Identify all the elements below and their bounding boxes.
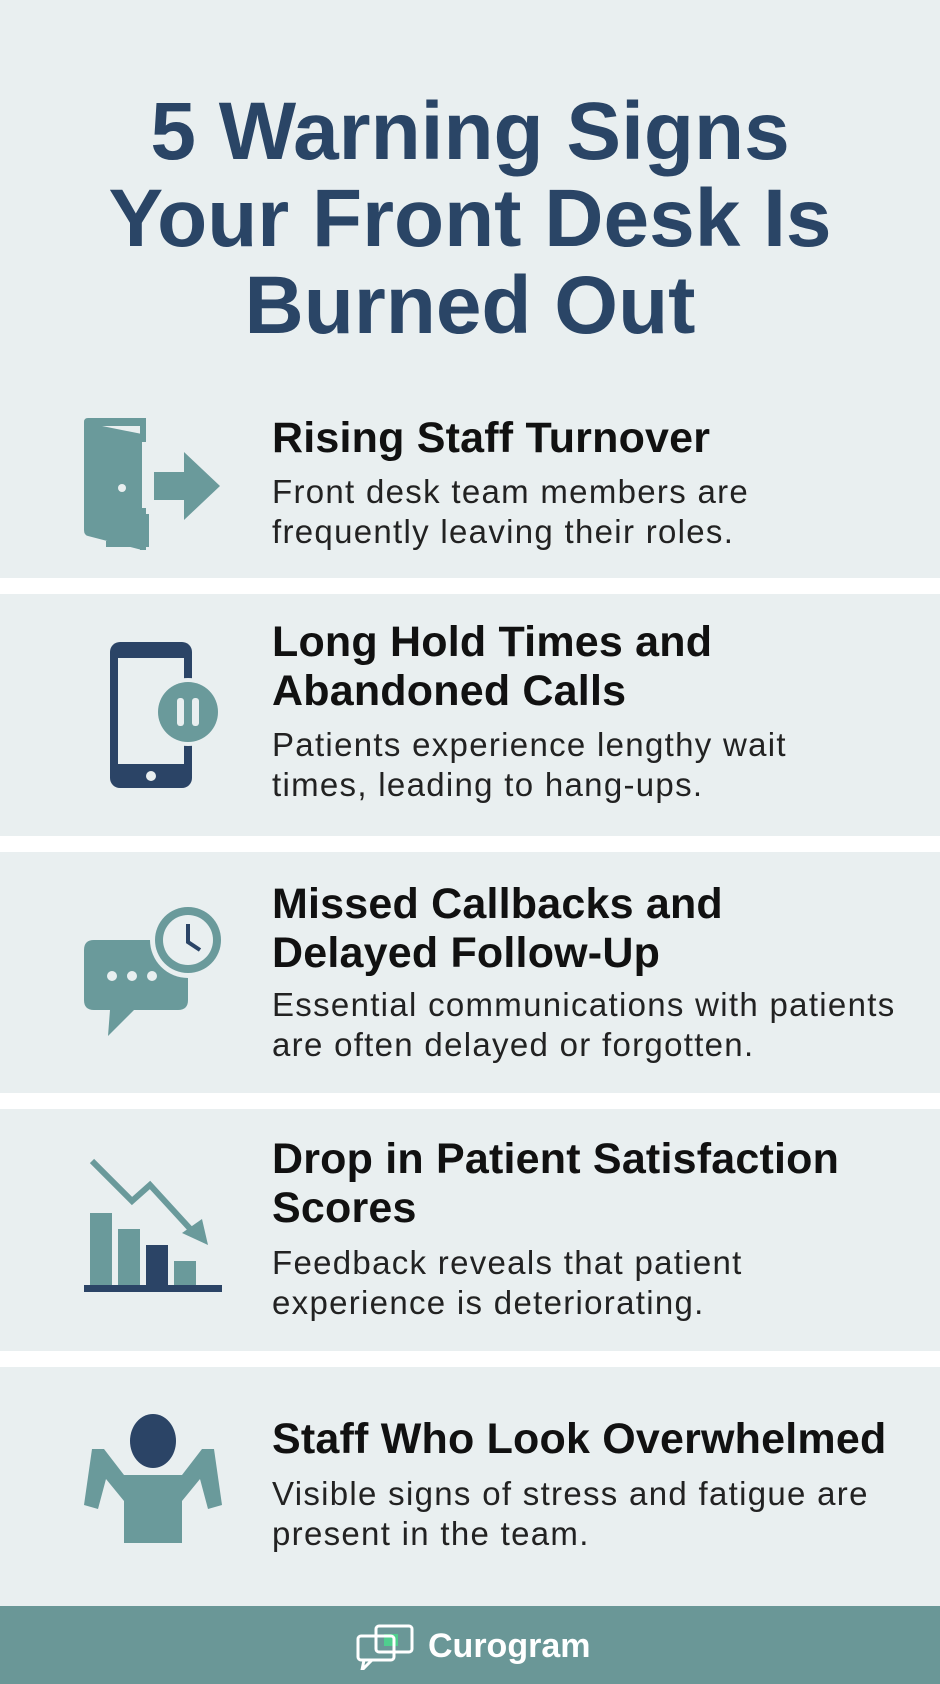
text: Front desk team members are	[272, 473, 749, 510]
panel: missed callbacks	[84, 880, 896, 1063]
text: Feedback reveals that patient	[272, 1244, 743, 1281]
text	[272, 1475, 869, 1552]
text	[272, 473, 749, 550]
icon: chat bubbles	[356, 1624, 414, 1670]
icon: declining bar chart	[84, 1158, 222, 1292]
logo	[356, 1624, 590, 1670]
icon: door exit	[84, 418, 220, 550]
icon: chat bubble with clock	[84, 907, 221, 1036]
text: frequently leaving their roles.	[272, 513, 734, 550]
heading: Staff Who Look Overwhelmed	[272, 1415, 886, 1463]
heading: Abandoned Calls	[272, 667, 626, 715]
panel: satisfaction scores	[84, 1135, 839, 1321]
brand name: Curogram	[428, 1627, 590, 1665]
footer	[0, 1606, 940, 1684]
heading	[272, 618, 712, 715]
text: are often delayed or forgotten.	[272, 1026, 754, 1063]
heading: Drop in Patient Satisfaction	[272, 1135, 839, 1183]
heading: Long Hold Times and	[272, 618, 712, 666]
text: Patients experience lengthy wait	[272, 726, 787, 763]
heading: Missed Callbacks and	[272, 880, 723, 928]
title	[109, 86, 831, 351]
heading	[272, 1135, 839, 1232]
text	[272, 1244, 743, 1321]
heading	[272, 880, 723, 977]
text: Essential communications with patients	[272, 986, 896, 1023]
text	[272, 986, 896, 1063]
text: experience is deteriorating.	[272, 1284, 705, 1321]
text: present in the team.	[272, 1515, 590, 1552]
panel: overwhelmed staff	[84, 1414, 886, 1552]
text: Visible signs of stress and fatigue are	[272, 1475, 869, 1512]
panel: rising staff turnover	[84, 414, 749, 550]
heading: Scores	[272, 1184, 417, 1232]
title: Burned Out	[245, 260, 695, 351]
title: 5 Warning Signs	[150, 86, 790, 177]
icon: phone with pause	[110, 642, 218, 788]
heading: Rising Staff Turnover	[272, 414, 710, 462]
title: Your Front Desk Is	[109, 173, 831, 264]
text	[272, 726, 787, 803]
panel: long hold times	[110, 618, 787, 803]
heading: Delayed Follow-Up	[272, 929, 660, 977]
icon: stressed person	[84, 1414, 222, 1543]
text: times, leading to hang-ups.	[272, 766, 703, 803]
